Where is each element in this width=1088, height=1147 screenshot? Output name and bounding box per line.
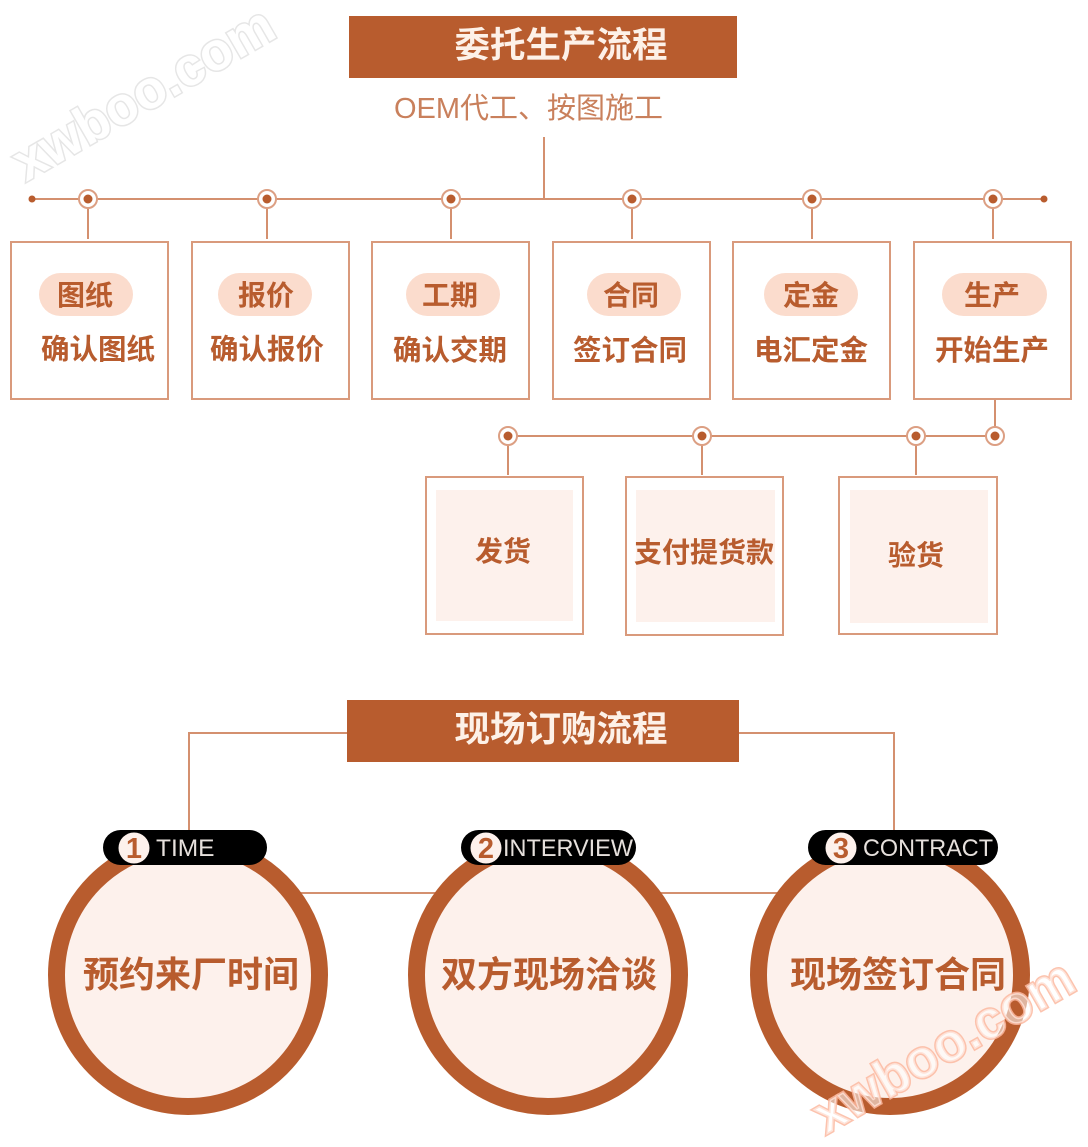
step card: deposit [733, 242, 890, 399]
tag: time: 1 [126, 833, 142, 865]
timeline: main row [28, 137, 1048, 239]
step card: deposit: 定金 [783, 280, 839, 311]
tag: contract: 3 [833, 833, 849, 865]
step circle: book factory visit [56, 830, 320, 1106]
step circle: face-to-face talks [416, 830, 680, 1106]
tag: time: TIME [156, 835, 215, 862]
step card: shipping: 发货 [475, 536, 531, 567]
heading: entrusted production process: 委托生产流程 [454, 25, 668, 65]
step card: quotation [192, 242, 349, 399]
connectors: heading to circles [189, 733, 894, 893]
tag: time [103, 830, 267, 865]
step card: drawings: 确认图纸 [41, 334, 155, 366]
step card: deposit: 电汇定金 [754, 335, 868, 367]
tag: contract [808, 830, 998, 865]
step card: production: 生产 [964, 280, 1020, 311]
tag: interview [461, 830, 636, 865]
watermark: bottom right: xwboo.com [802, 947, 1085, 1145]
step card: schedule: 工期 [422, 280, 478, 311]
step card: quotation: 报价 [238, 280, 294, 311]
tag: contract: CONTRACT [863, 835, 993, 862]
step card: contract: 合同 [603, 280, 659, 311]
heading: on-site ordering process: 现场订购流程 [454, 709, 668, 749]
step card: production: 开始生产 [935, 335, 1049, 367]
step card: drawings: 图纸 [57, 280, 113, 311]
subtitle: OEM代工、按图施工 [394, 92, 663, 125]
step card: pay on delivery: 支付提货款 [634, 537, 774, 568]
step circle: sign contract on site [758, 830, 1022, 1106]
heading: entrusted production process [349, 16, 737, 78]
step card: inspection: 验货 [888, 540, 944, 571]
step card: quotation: 确认报价 [210, 334, 324, 366]
step card: schedule [372, 242, 529, 399]
step card: schedule: 确认交期 [393, 335, 507, 367]
step card: drawings [11, 242, 168, 399]
tag: interview: 2 [478, 833, 494, 865]
step card: contract [553, 242, 710, 399]
step card: pay on delivery [626, 477, 783, 635]
step circle: book factory visit: 预约来厂时间 [83, 954, 299, 995]
step card: inspection [839, 477, 997, 634]
step circle: face-to-face talks: 双方现场洽谈 [441, 954, 657, 995]
tag: interview: INTERVIEW [503, 835, 634, 862]
step card: shipping [426, 477, 583, 634]
step card: contract: 签订合同 [573, 335, 687, 367]
step circle: sign contract on site: 现场签订合同 [790, 954, 1006, 995]
step card: production [914, 242, 1071, 399]
heading: on-site ordering process [347, 700, 739, 762]
timeline: secondary row [499, 400, 1004, 475]
